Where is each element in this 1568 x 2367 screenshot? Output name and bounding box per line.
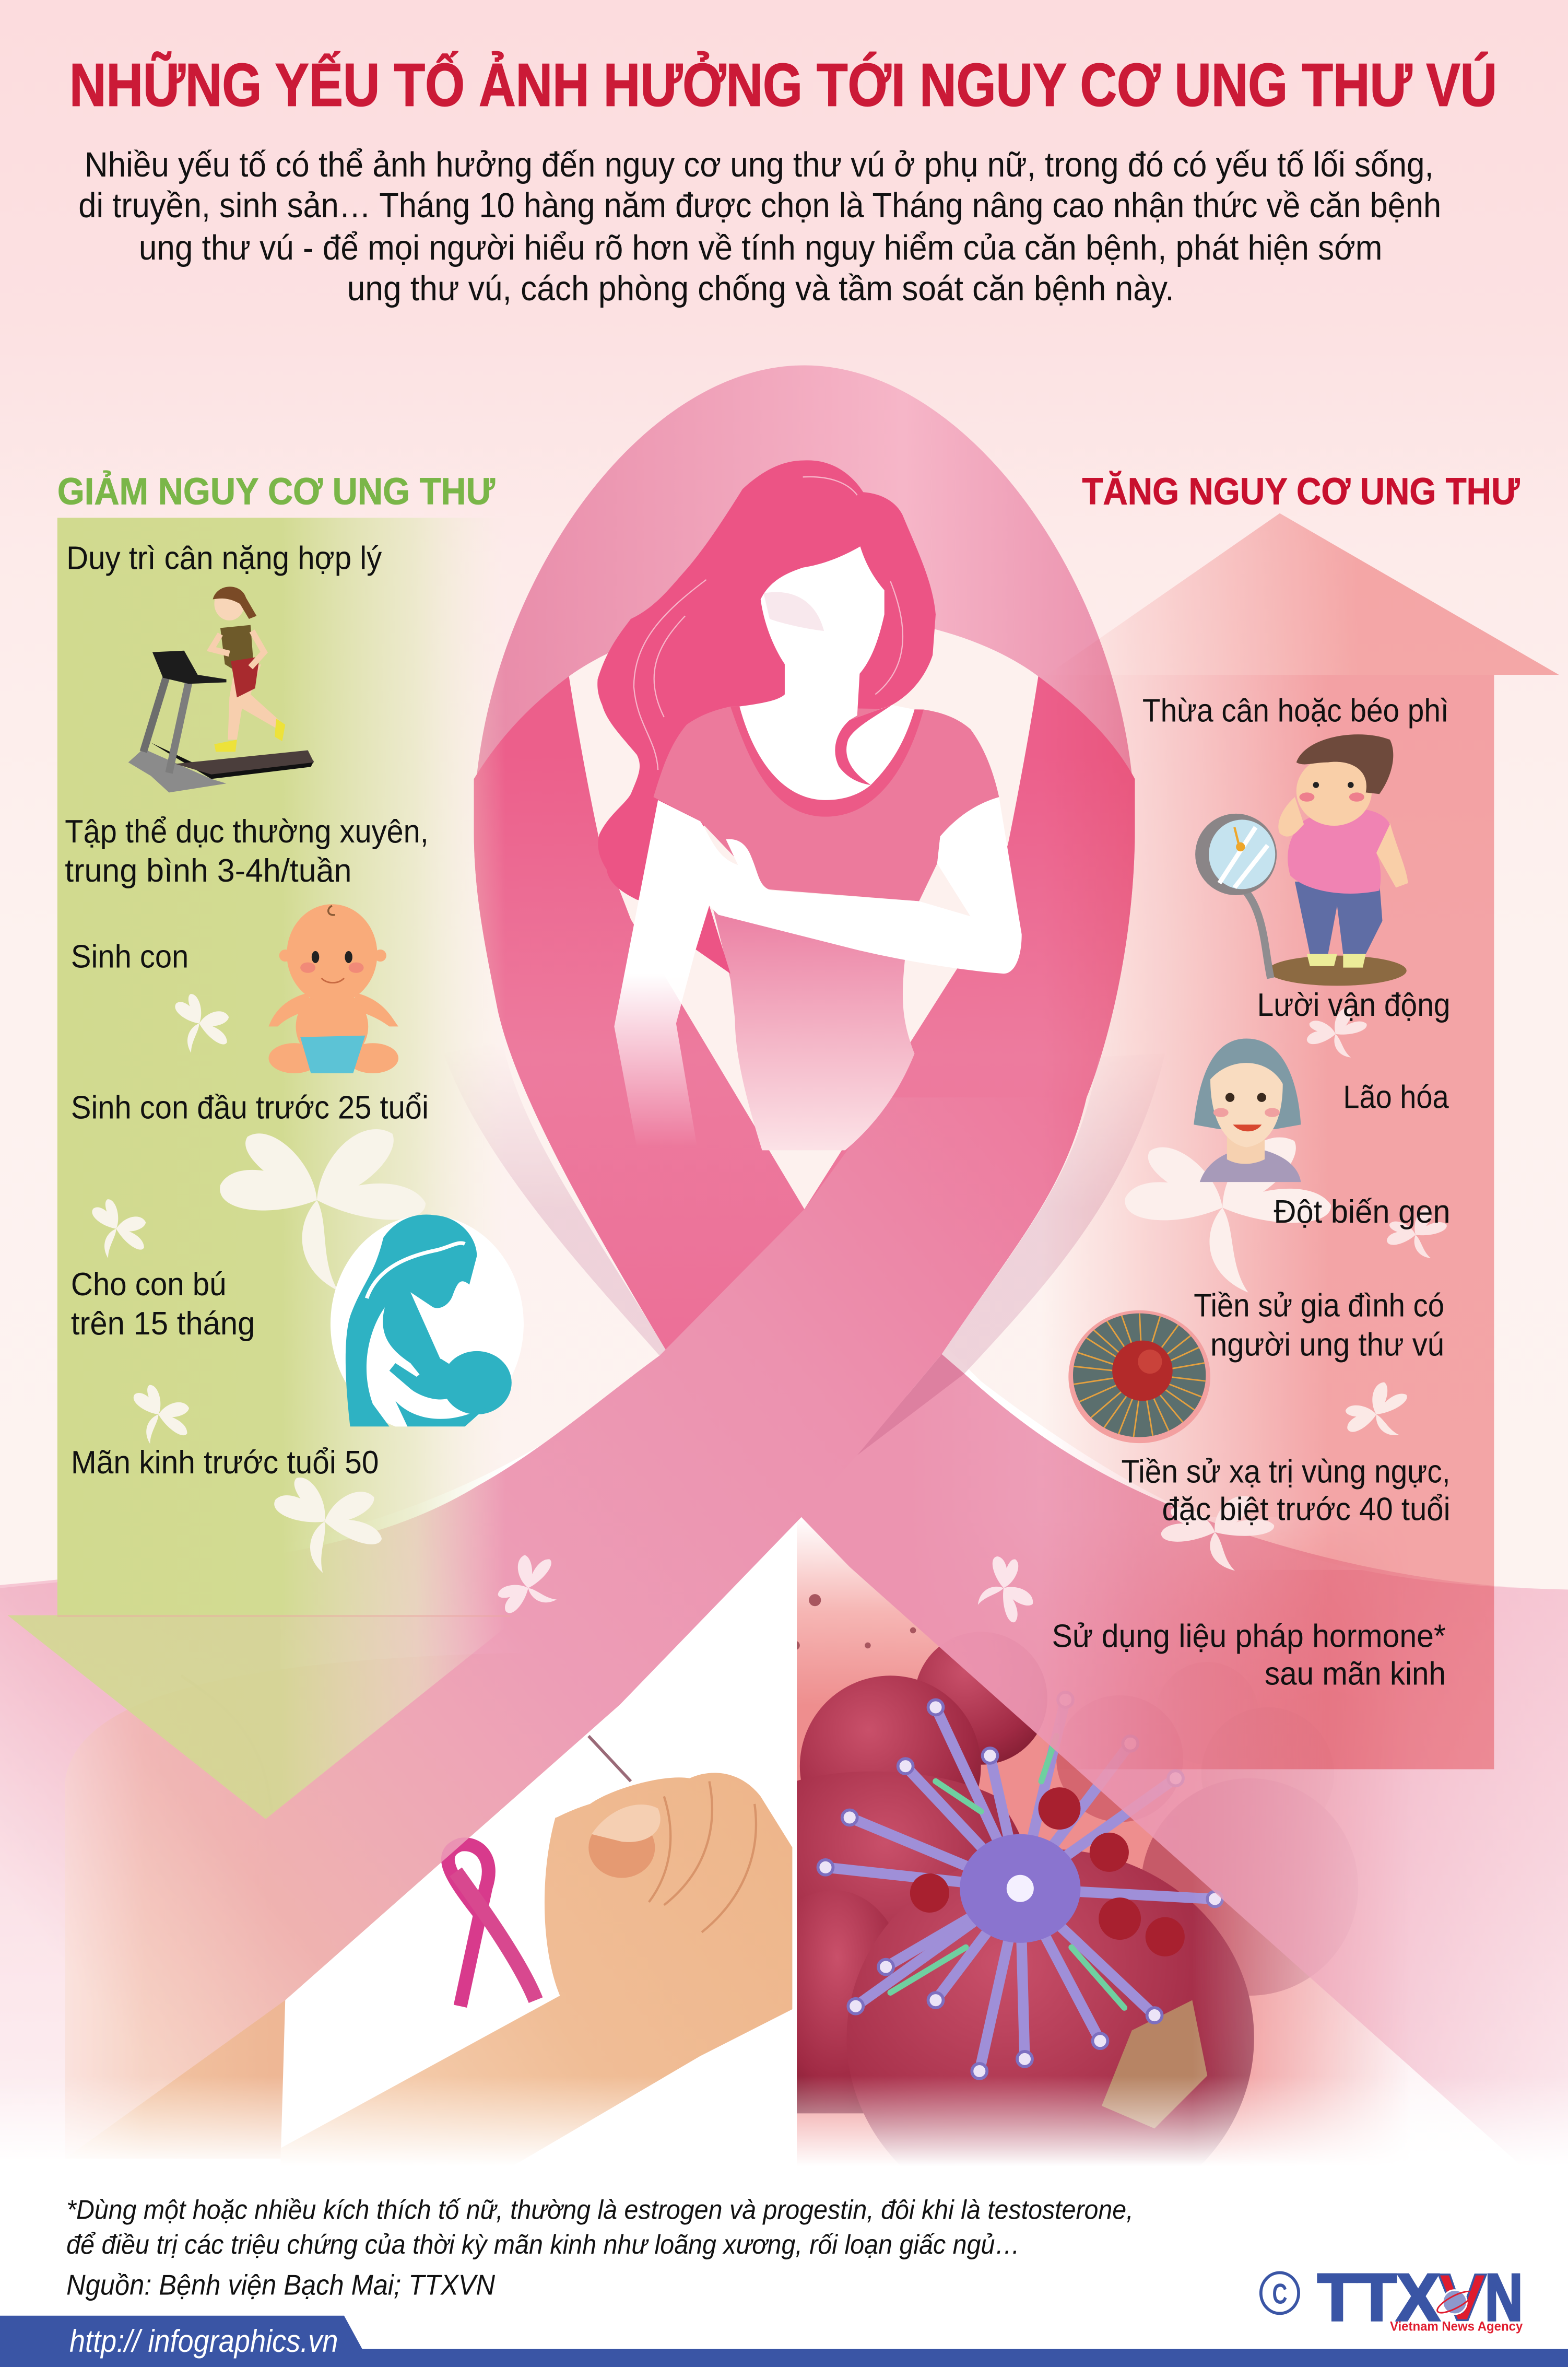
icon: baby bbox=[268, 904, 398, 1073]
intro text: ung thư vú - để mọi người hiểu rõ hơn về tính nguy hiểm của căn bệnh, phát hiện sớm bbox=[139, 229, 1382, 267]
increase risk items: Tiền sử gia đình có bbox=[1194, 1287, 1444, 1323]
logo: Vietnam News Agency bbox=[1390, 2320, 1523, 2334]
icon: cancer cell bbox=[1068, 1310, 1210, 1444]
increase risk items: người ung thư vú bbox=[1210, 1327, 1444, 1363]
icon: purple star cell bbox=[818, 1692, 1222, 2079]
footnote: *Dùng một hoặc nhiều kích thích tố nữ, thường là estrogen và progestin, đôi khi là testosterone, bbox=[66, 2195, 1134, 2225]
ribbon: right tail bbox=[801, 1374, 1568, 2174]
icon: treadmill and runner bbox=[128, 587, 314, 792]
heading: increase risk: TĂNG NGUY CƠ UNG THƯ bbox=[1082, 471, 1520, 512]
face bbox=[761, 546, 885, 685]
increase risk items: Tiền sử xạ trị vùng ngực, bbox=[1121, 1454, 1451, 1490]
increase risk items: Sử dụng liệu pháp hormone* bbox=[1052, 1618, 1446, 1654]
lower torso bbox=[712, 906, 924, 1150]
reduce risk items: trung bình 3-4h/tuần bbox=[65, 853, 351, 889]
reduce risk items: Cho con bú bbox=[71, 1267, 227, 1303]
increase risk items: Lười vận động bbox=[1257, 987, 1451, 1023]
shirt bbox=[653, 707, 999, 901]
intro text: di truyền, sinh sản… Tháng 10 hàng năm được chọn là Tháng nâng cao nhận thức về căn bệnh bbox=[78, 186, 1441, 225]
photo: cancer cells bbox=[797, 1517, 1395, 2163]
icon: copyright bbox=[1261, 2272, 1299, 2313]
increase risk items: đặc biệt trước 40 tuổi bbox=[1162, 1492, 1451, 1528]
icon: elderly woman bbox=[1194, 1039, 1301, 1182]
reduce risk items: Duy trì cân nặng hợp lý bbox=[66, 541, 382, 577]
photo divider bbox=[792, 1517, 797, 2166]
decorative flowers bbox=[77, 987, 1456, 1632]
footnote: để điều trị các triệu chứng của thời kỳ mãn kinh như loãng xương, rối loạn giấc ngủ… bbox=[66, 2230, 1020, 2260]
left arm bbox=[614, 800, 709, 1147]
icon: small pink ribbon bbox=[448, 1844, 536, 2006]
neck and chest bbox=[739, 664, 871, 800]
intro text: Nhiều yếu tố có thể ảnh hưởng đến nguy cơ ung thư vú ở phụ nữ, trong đó có yếu tố lối sống, bbox=[85, 146, 1434, 184]
hair bbox=[597, 460, 936, 906]
ribbon: left tail and front strand bbox=[0, 1097, 1087, 2159]
reduce risk items bbox=[65, 541, 429, 1481]
reduce risk items: Mãn kinh trước tuổi 50 bbox=[71, 1445, 379, 1481]
increase risk items: Lão hóa bbox=[1343, 1079, 1449, 1115]
footer band: http:// infographics.vn bbox=[69, 2323, 338, 2359]
increase risk items: sau mãn kinh bbox=[1265, 1656, 1446, 1692]
intro text: ung thư vú, cách phòng chống và tầm soát căn bệnh này. bbox=[347, 269, 1174, 308]
ribbon bbox=[0, 365, 1568, 2174]
ribbon: darker lower band bbox=[474, 676, 1135, 1434]
icon: copyright: C bbox=[1272, 2278, 1287, 2310]
hair strands bbox=[634, 477, 903, 770]
increase risk items: Thừa cân hoặc béo phì bbox=[1142, 693, 1449, 729]
reduce risk items: Sinh con đầu trước 25 tuổi bbox=[71, 1090, 429, 1126]
intro text bbox=[78, 146, 1441, 308]
woman figure bbox=[597, 460, 1022, 1150]
footer band bbox=[0, 2316, 1568, 2367]
reduce risk items: Sinh con bbox=[71, 939, 188, 975]
panel: reduce risk (green down arrow) bbox=[7, 518, 521, 1819]
logo bbox=[1261, 2260, 1523, 2334]
ribbon: upper loop bbox=[474, 365, 1135, 1434]
logo: TTX bbox=[1317, 2260, 1440, 2334]
source: Nguồn: Bệnh viện Bạch Mai; TTXVN bbox=[66, 2268, 495, 2301]
ribbon: inner opening bbox=[569, 613, 1039, 1209]
panel: increase risk (red up arrow) bbox=[1026, 513, 1559, 1769]
fade over bottom of photos bbox=[0, 2076, 1568, 2181]
reduce risk items: Tập thể dục thường xuyên, bbox=[65, 814, 429, 850]
logo: V bbox=[1438, 2260, 1487, 2334]
increase risk items bbox=[1052, 693, 1451, 1692]
icon: mother breastfeeding bbox=[331, 1214, 524, 1433]
icon: overweight woman on scale bbox=[1195, 734, 1408, 986]
right arm bbox=[687, 797, 1022, 974]
footnote bbox=[66, 2195, 1134, 2260]
increase risk items: Đột biến gen bbox=[1274, 1194, 1451, 1230]
heading: reduce risk: GIẢM NGUY CƠ UNG THƯ bbox=[57, 470, 495, 512]
photo: hands on chest with pink ribbon bbox=[65, 1653, 795, 2174]
reduce risk items: trên 15 tháng bbox=[71, 1306, 255, 1342]
logo: N bbox=[1485, 2260, 1523, 2334]
neckline bbox=[730, 707, 924, 817]
